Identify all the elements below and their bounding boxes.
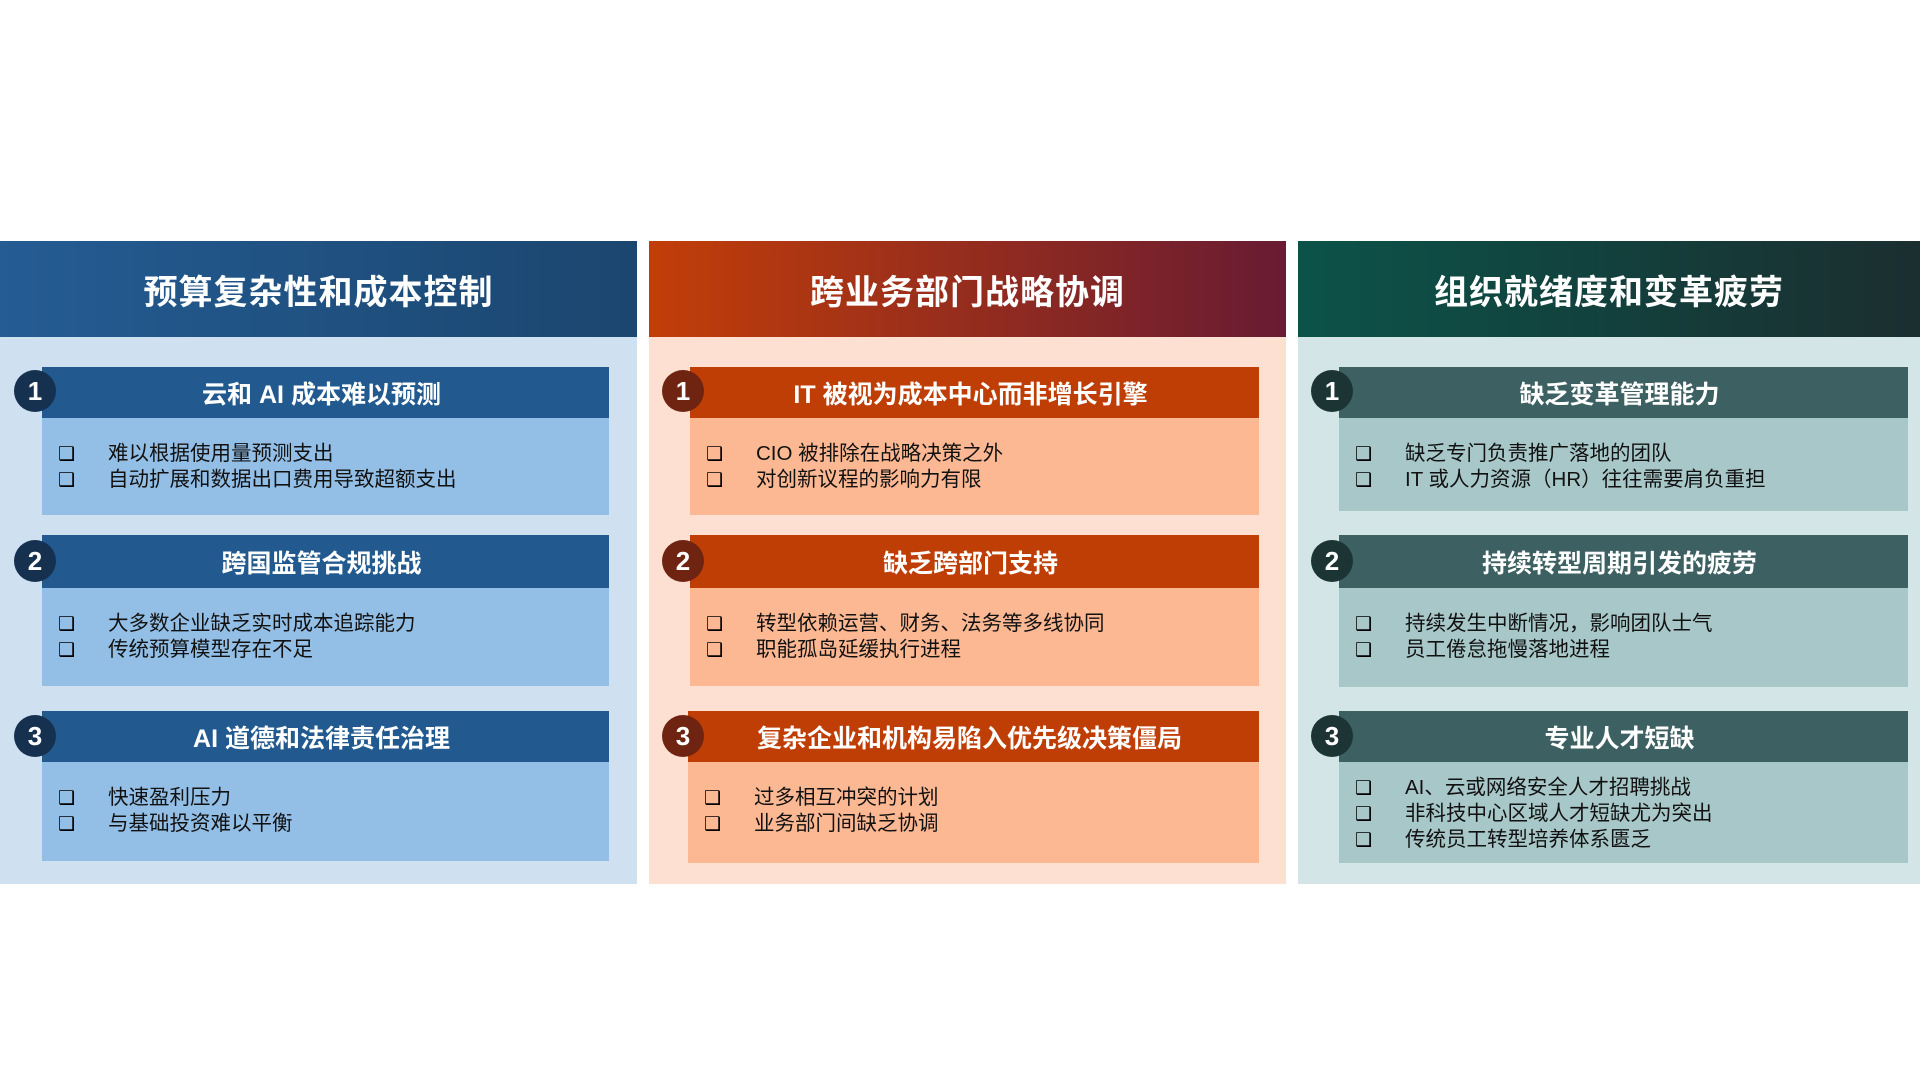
card: deadlock: 业务部门间缺乏协调 (754, 812, 938, 835)
card: cloud AI cost: 云和 AI 成本难以预测 (202, 380, 441, 408)
card: talent shortage: 传统员工转型培养体系匮乏 (1405, 828, 1651, 851)
heading: budget: 预算复杂性和成本控制 (144, 274, 494, 312)
icon: number 1: 1 (28, 376, 42, 406)
card: cross support: 职能孤岛延缓执行进程 (756, 638, 961, 661)
card: talent shortage (1339, 711, 1908, 863)
card: deadlock: 过多相互冲突的计划 (754, 786, 938, 809)
card: talent shortage: 专业人才短缺 (1544, 724, 1694, 752)
icon: number 1 (14, 370, 56, 412)
card: cloud AI cost: 难以根据使用量预测支出 (108, 442, 334, 465)
card: deadlock: ❑ (704, 787, 721, 809)
panel: budget complexity (0, 241, 637, 884)
icon: number 2 (1311, 540, 1353, 582)
card: deadlock (688, 711, 1259, 863)
card: cross support: 转型依赖运营、财务、法务等多线协同 (756, 612, 1104, 635)
heading: cross-department: 跨业务部门战略协调 (810, 274, 1125, 312)
card: cross support: 缺乏跨部门支持 (883, 550, 1058, 578)
card: change management: 缺乏变革管理能力 (1519, 380, 1720, 408)
card: talent shortage: ❑ (1355, 803, 1372, 825)
card: AI ethics: ❑ (58, 787, 75, 809)
icon: number 3 (1311, 715, 1353, 757)
card: change management: 缺乏专门负责推广落地的团队 (1405, 442, 1672, 465)
card: IT cost center: ❑ (706, 469, 723, 491)
heading: budget (0, 241, 637, 337)
panel: cross-department (649, 241, 1286, 884)
card: cloud AI cost: ❑ (58, 469, 75, 491)
icon: number 1 (1311, 370, 1353, 412)
card: cross support (690, 535, 1259, 686)
card: AI ethics (42, 711, 609, 861)
card: cloud AI cost: 自动扩展和数据出口费用导致超额支出 (108, 468, 456, 491)
icon: number 3: 3 (676, 720, 690, 750)
card: AI ethics: ❑ (58, 813, 75, 835)
card: AI ethics: 与基础投资难以平衡 (108, 812, 292, 835)
card: deadlock: 复杂企业和机构易陷入优先级决策僵局 (757, 724, 1182, 752)
card: IT cost center (690, 367, 1259, 515)
panel: organizational readiness (1298, 241, 1920, 884)
card: change management: ❑ (1355, 469, 1372, 491)
card: IT cost center: CIO 被排除在战略决策之外 (756, 442, 1003, 465)
card: AI ethics: 快速盈利压力 (108, 786, 231, 809)
card: talent shortage: 非科技中心区域人才短缺尤为突出 (1405, 802, 1712, 825)
icon: number 2 (14, 540, 56, 582)
heading: readiness: 组织就绪度和变革疲劳 (1434, 274, 1784, 312)
icon: number 2: 2 (676, 546, 690, 576)
card: AI ethics: AI 道德和法律责任治理 (193, 724, 450, 752)
card: fatigue: 持续发生中断情况，影响团队士气 (1405, 612, 1712, 635)
icon: number 3 (662, 715, 704, 757)
icon: number 1: 1 (676, 376, 690, 406)
card: change management: ❑ (1355, 443, 1372, 465)
icon: number 1: 1 (1325, 376, 1339, 406)
card: change management: IT 或人力资源（HR）往往需要肩负重担 (1405, 468, 1766, 491)
card: regulatory: 大多数企业缺乏实时成本追踪能力 (108, 612, 416, 635)
icon: number 3 (14, 715, 56, 757)
card: deadlock: ❑ (704, 813, 721, 835)
card: change management (1339, 367, 1908, 511)
card: regulatory: ❑ (58, 639, 75, 661)
card: IT cost center: IT 被视为成本中心而非增长引擎 (793, 380, 1148, 408)
card: fatigue (1339, 535, 1908, 687)
card: IT cost center: ❑ (706, 443, 723, 465)
card: cloud AI cost (42, 367, 609, 515)
card: regulatory (42, 535, 609, 686)
card: cross support: ❑ (706, 639, 723, 661)
card: regulatory: ❑ (58, 613, 75, 635)
icon: number 3: 3 (1325, 720, 1339, 750)
icon: number 1 (662, 370, 704, 412)
icon: number 2 (662, 540, 704, 582)
card: regulatory: 传统预算模型存在不足 (108, 638, 313, 661)
card: cloud AI cost: ❑ (58, 443, 75, 465)
icon: number 2: 2 (28, 546, 42, 576)
card: talent shortage: AI、云或网络安全人才招聘挑战 (1405, 776, 1691, 799)
card: talent shortage: ❑ (1355, 777, 1372, 799)
card: regulatory: 跨国监管合规挑战 (221, 550, 422, 578)
icon: number 3: 3 (28, 720, 42, 750)
card: fatigue: 持续转型周期引发的疲劳 (1482, 550, 1757, 578)
card: cross support: ❑ (706, 613, 723, 635)
icon: number 2: 2 (1325, 546, 1339, 576)
card: fatigue: ❑ (1355, 613, 1372, 635)
card: fatigue: 员工倦怠拖慢落地进程 (1405, 638, 1610, 661)
card: talent shortage: ❑ (1355, 829, 1372, 851)
card: fatigue: ❑ (1355, 639, 1372, 661)
card: IT cost center: 对创新议程的影响力有限 (756, 468, 982, 491)
heading: cross-department (649, 241, 1286, 337)
heading: readiness (1298, 241, 1920, 337)
